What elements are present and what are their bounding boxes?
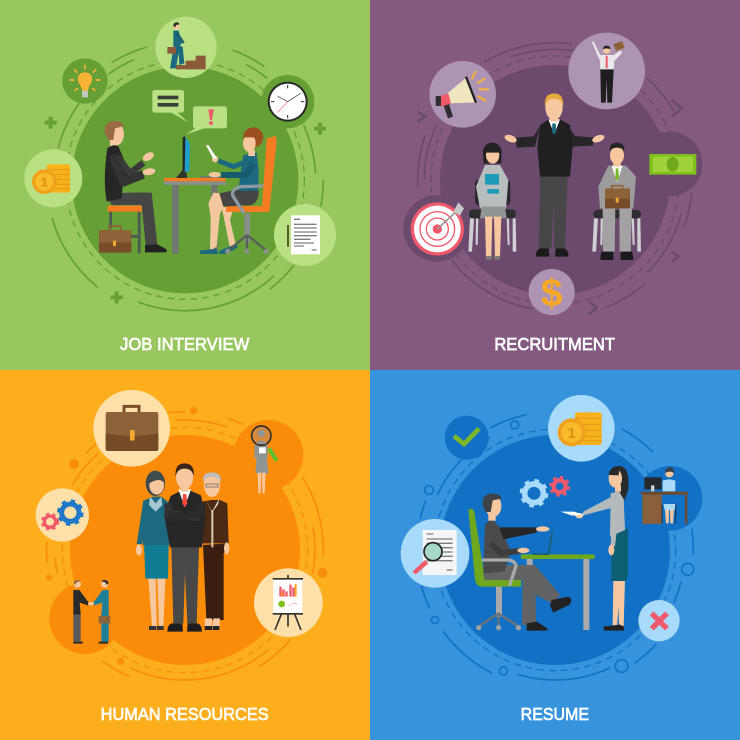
standing recruiter (504, 93, 605, 257)
icon: gears (521, 477, 569, 506)
icon: target (403, 195, 470, 262)
title: job interview: JOB INTERVIEW (120, 334, 250, 354)
orange blob (49, 420, 303, 665)
man candidate with briefcase and chair (99, 121, 167, 253)
icon: winner with briefcase (568, 33, 645, 109)
title: resume: RESUME (521, 704, 589, 724)
icon: reject cross (638, 600, 680, 641)
icon: document with magnifier (401, 519, 469, 588)
big circle (72, 67, 298, 293)
three business people (136, 463, 229, 632)
icon: megaphone (429, 61, 496, 128)
desk (521, 531, 595, 630)
desk and monitor (164, 136, 226, 254)
seated man with briefcase (592, 143, 641, 260)
panel: resume (370, 370, 740, 740)
icon: gears (36, 488, 89, 542)
plus signs (45, 117, 326, 303)
panel: human resources (0, 370, 370, 740)
icon: dollar (529, 269, 575, 315)
icon: resume document (274, 204, 336, 266)
big circle (440, 65, 670, 295)
icon: magnified candidate (252, 426, 278, 493)
panel: recruitment (370, 0, 740, 370)
icon: receptionist at desk (641, 467, 688, 524)
big circle (440, 435, 702, 665)
icon: money (638, 132, 702, 196)
icon: handshake (73, 580, 110, 644)
speech bubbles (152, 90, 227, 134)
icon: lightbulb (62, 58, 108, 104)
icon: briefcase (93, 390, 170, 467)
icon: coins (548, 395, 615, 462)
icon: clock (261, 75, 314, 128)
woman interviewer with chair (200, 127, 277, 254)
standing woman (561, 466, 628, 631)
seated woman (468, 143, 516, 260)
icon: career stairs (155, 17, 217, 78)
seated man (468, 494, 572, 631)
title: recruitment: RECRUITMENT (494, 334, 615, 354)
title: human resources: HUMAN RESOURCES (101, 704, 269, 724)
icon: coins: 1 (568, 426, 576, 442)
icon: check mark (445, 416, 489, 460)
panel: job interview (0, 0, 370, 370)
icon: coins: 1 (41, 175, 49, 190)
icon: chart easel (254, 568, 323, 637)
icon: dollar: $ (541, 271, 563, 315)
icon: coins (24, 149, 82, 207)
